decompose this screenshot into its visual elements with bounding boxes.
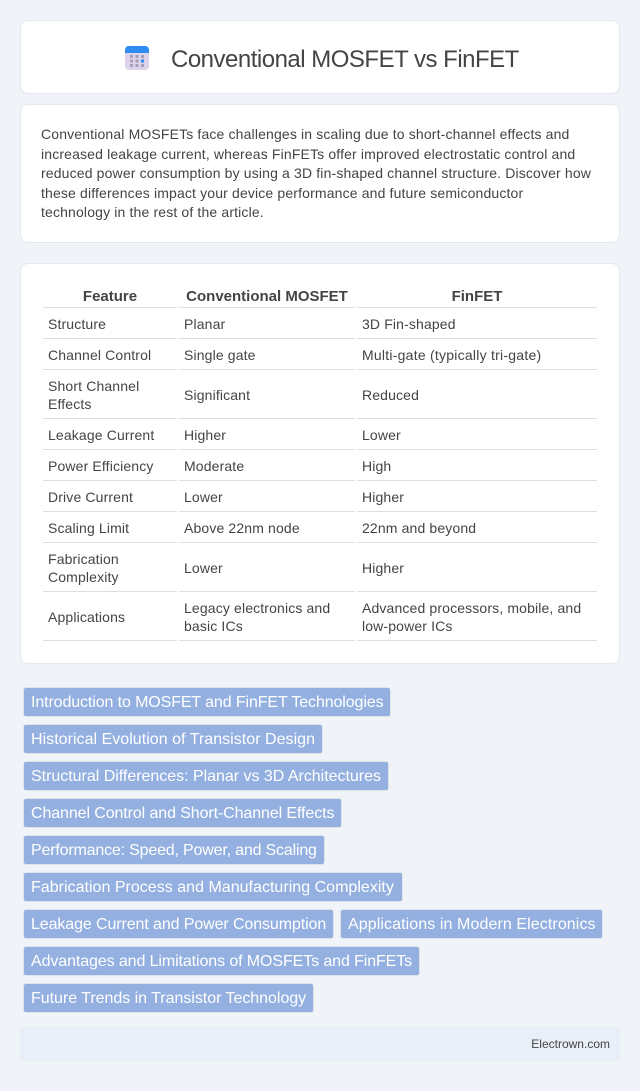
row: Leakage Current: Leakage Current <box>48 427 154 443</box>
comparison table <box>43 288 597 641</box>
row: Fabrication Complexity <box>48 551 404 585</box>
row: Applications: Applications <box>48 609 125 625</box>
row: Scaling Limit: 22nm and beyond <box>362 520 476 536</box>
row: Structure: Structure <box>48 316 106 332</box>
tag: Applications: Applications in Modern Electronics <box>348 916 596 933</box>
row: Drive Current: Lower <box>184 489 223 505</box>
tag: Leakage Current <box>23 909 334 939</box>
row: Applications: Legacy electronics and <box>184 600 330 616</box>
row: Channel Control: Channel Control <box>48 347 151 363</box>
tag: Fabrication Process <box>23 872 403 902</box>
tag: Advantages <box>23 946 420 976</box>
tag: Fabrication Process: Fabrication Process and Manufacturing Complexity <box>31 879 394 896</box>
intro paragraph <box>41 126 591 220</box>
intro paragraph: reduced power consumption by using a 3D fin-shaped channel structure. Discover how <box>41 165 591 181</box>
row: Applications: basic ICs <box>184 618 243 634</box>
table header: Feature <box>83 288 137 305</box>
tag: Leakage Current: Leakage Current and Power Consumption <box>31 916 326 933</box>
row: Channel Control: Multi-gate (typically tri-gate) <box>362 347 541 363</box>
title: Conventional MOSFET vs FinFET <box>171 46 519 73</box>
row: Power Efficiency: Moderate <box>184 458 244 474</box>
tag: Channel Control <box>23 798 342 828</box>
panel: comparison table card <box>20 263 620 664</box>
row: Applications: low-power ICs <box>362 618 453 634</box>
table header: FinFET <box>452 288 502 305</box>
row: Short Channel Effects: Significant <box>184 387 250 403</box>
row: Scaling Limit: Scaling Limit <box>48 520 129 536</box>
row: Short Channel Effects <box>48 378 419 412</box>
tag: Structural Differences <box>23 761 389 791</box>
footer text: Electrown.com <box>531 1037 610 1051</box>
tag: Applications <box>340 909 603 939</box>
tag: Performance <box>23 835 325 865</box>
row: Structure: Planar <box>184 316 225 332</box>
row: Applications <box>48 600 581 634</box>
row: Fabrication Complexity: Lower <box>184 560 223 576</box>
tag: Performance: Performance: Speed, Power, and Scaling <box>31 842 317 859</box>
intro paragraph: increased leakage current, whereas FinFETs offer improved electrostatic control and <box>41 146 575 162</box>
row: Drive Current <box>48 489 404 505</box>
icon: calendar grid <box>125 46 149 70</box>
table header: Conventional MOSFET <box>186 288 348 305</box>
row: Structure <box>48 316 456 332</box>
tag: Future Trends <box>23 983 314 1013</box>
row: Power Efficiency: High <box>362 458 391 474</box>
tag: Structural Differences: Structural Differences: Planar vs 3D Architectures <box>31 768 381 785</box>
tag: Advantages: Advantages and Limitations of MOSFETs and FinFETs <box>31 953 412 970</box>
row: Applications: Advanced processors, mobile, and <box>362 600 581 616</box>
row: Fabrication Complexity: Higher <box>362 560 404 576</box>
row: Fabrication Complexity: Fabrication <box>48 551 119 567</box>
row: Short Channel Effects: Effects <box>48 396 92 412</box>
row: Power Efficiency <box>48 458 391 474</box>
row: Leakage Current: Higher <box>184 427 226 443</box>
row: Leakage Current <box>48 427 401 443</box>
tag: Future Trends: Future Trends in Transistor Technology <box>31 990 306 1007</box>
row: Drive Current: Drive Current <box>48 489 133 505</box>
intro paragraph: these differences impact your device performance and future semiconductor <box>41 185 523 201</box>
intro paragraph: Conventional MOSFETs face challenges in scaling due to short-channel effects and <box>41 126 569 142</box>
row: Structure: 3D Fin-shaped <box>362 316 456 332</box>
row: Leakage Current: Lower <box>362 427 401 443</box>
tag: Historical Evolution <box>23 724 323 754</box>
tag: Channel Control: Channel Control and Short-Channel Effects <box>31 805 334 822</box>
tag: Introduction: Introduction to MOSFET and FinFET Technologies <box>31 694 383 711</box>
row: Short Channel Effects: Reduced <box>362 387 419 403</box>
row: Short Channel Effects: Short Channel <box>48 378 139 394</box>
panel: intro text card <box>20 104 620 243</box>
row: Channel Control: Single gate <box>184 347 256 363</box>
row: Scaling Limit: Above 22nm node <box>184 520 300 536</box>
table header <box>83 288 502 305</box>
tag: Historical Evolution: Historical Evolution of Transistor Design <box>31 731 315 748</box>
intro paragraph: technology in the rest of the article. <box>41 204 264 220</box>
row: Fabrication Complexity: Complexity <box>48 569 119 585</box>
tag: Introduction <box>23 687 391 717</box>
footer bar <box>20 1027 620 1061</box>
row: Drive Current: Higher <box>362 489 404 505</box>
row: Channel Control <box>48 347 541 363</box>
row: Power Efficiency: Power Efficiency <box>48 458 153 474</box>
row: Scaling Limit <box>48 520 476 536</box>
panel: title card <box>20 20 620 94</box>
